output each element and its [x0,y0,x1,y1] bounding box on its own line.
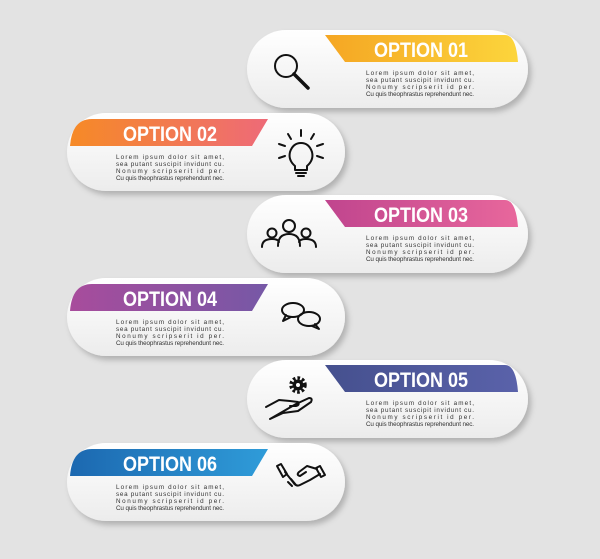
panel: option 04: sea putant suscipit invidunt cu. [116,326,224,333]
panel: option 03 [247,195,528,273]
icon: magnifier [275,55,308,88]
band: option 03 [325,200,518,227]
panel: option 04: Cu quis theophrastus reprehendunt nec. [116,340,224,347]
band: option 06 [70,449,268,476]
panel: option 06: sea putant suscipit invidunt cu. [116,491,224,498]
heading: option 04: OPTION 04 [123,288,217,311]
icon: speech bubbles [282,303,320,329]
text block: option 01: Lorem ipsum dolor sit amet, [366,70,474,77]
icon: light bulb [279,130,323,176]
panel: option 02: Cu quis theophrastus reprehendunt nec. [116,175,224,182]
heading: option 05: OPTION 05 [374,369,468,392]
panel: option 04: Nonumy scripserit id per. [116,333,224,340]
text block: option 04: Lorem ipsum dolor sit amet, [116,319,224,326]
panel: option 01: sea putant suscipit invidunt cu. [366,77,474,84]
panel: option 03: sea putant suscipit invidunt cu. [366,242,474,249]
panel: option 06: Nonumy scripserit id per. [116,498,224,505]
band: option 02 [70,119,268,146]
icon: hand with gear [266,378,312,419]
heading: option 03: OPTION 03 [374,204,468,227]
icon: handshake [277,464,325,486]
panel: option 02: Nonumy scripserit id per. [116,168,224,175]
icon: people group [262,220,316,247]
text block: option 03: Lorem ipsum dolor sit amet, [366,235,474,242]
panel: option 06: Cu quis theophrastus reprehendunt nec. [116,505,224,512]
heading: option 01: OPTION 01 [374,39,468,62]
band: option 01 [325,35,518,62]
text block: option 05: Lorem ipsum dolor sit amet, [366,400,474,407]
panel: option 01 [247,30,528,108]
heading: option 02: OPTION 02 [123,123,217,146]
panel: option 06 [67,443,345,521]
panel: option 03: Cu quis theophrastus reprehendunt nec. [366,256,474,263]
panel: option 05 [247,360,528,438]
panel: option 02: sea putant suscipit invidunt cu. [116,161,224,168]
panel: option 04 [67,278,345,356]
panel: option 05: sea putant suscipit invidunt cu. [366,407,474,414]
band: option 05 [325,365,518,392]
panel: option 05: Cu quis theophrastus reprehendunt nec. [366,421,474,428]
text block: option 06: Lorem ipsum dolor sit amet, [116,484,224,491]
panel: option 05: Nonumy scripserit id per. [366,414,474,421]
panel: option 03: Nonumy scripserit id per. [366,249,474,256]
panel: option 01: Nonumy scripserit id per. [366,84,474,91]
band: option 04 [70,284,268,311]
heading: option 06: OPTION 06 [123,453,217,476]
panel: option 01: Cu quis theophrastus reprehendunt nec. [366,91,474,98]
text block: option 02: Lorem ipsum dolor sit amet, [116,154,224,161]
panel: option 02 [67,113,345,191]
